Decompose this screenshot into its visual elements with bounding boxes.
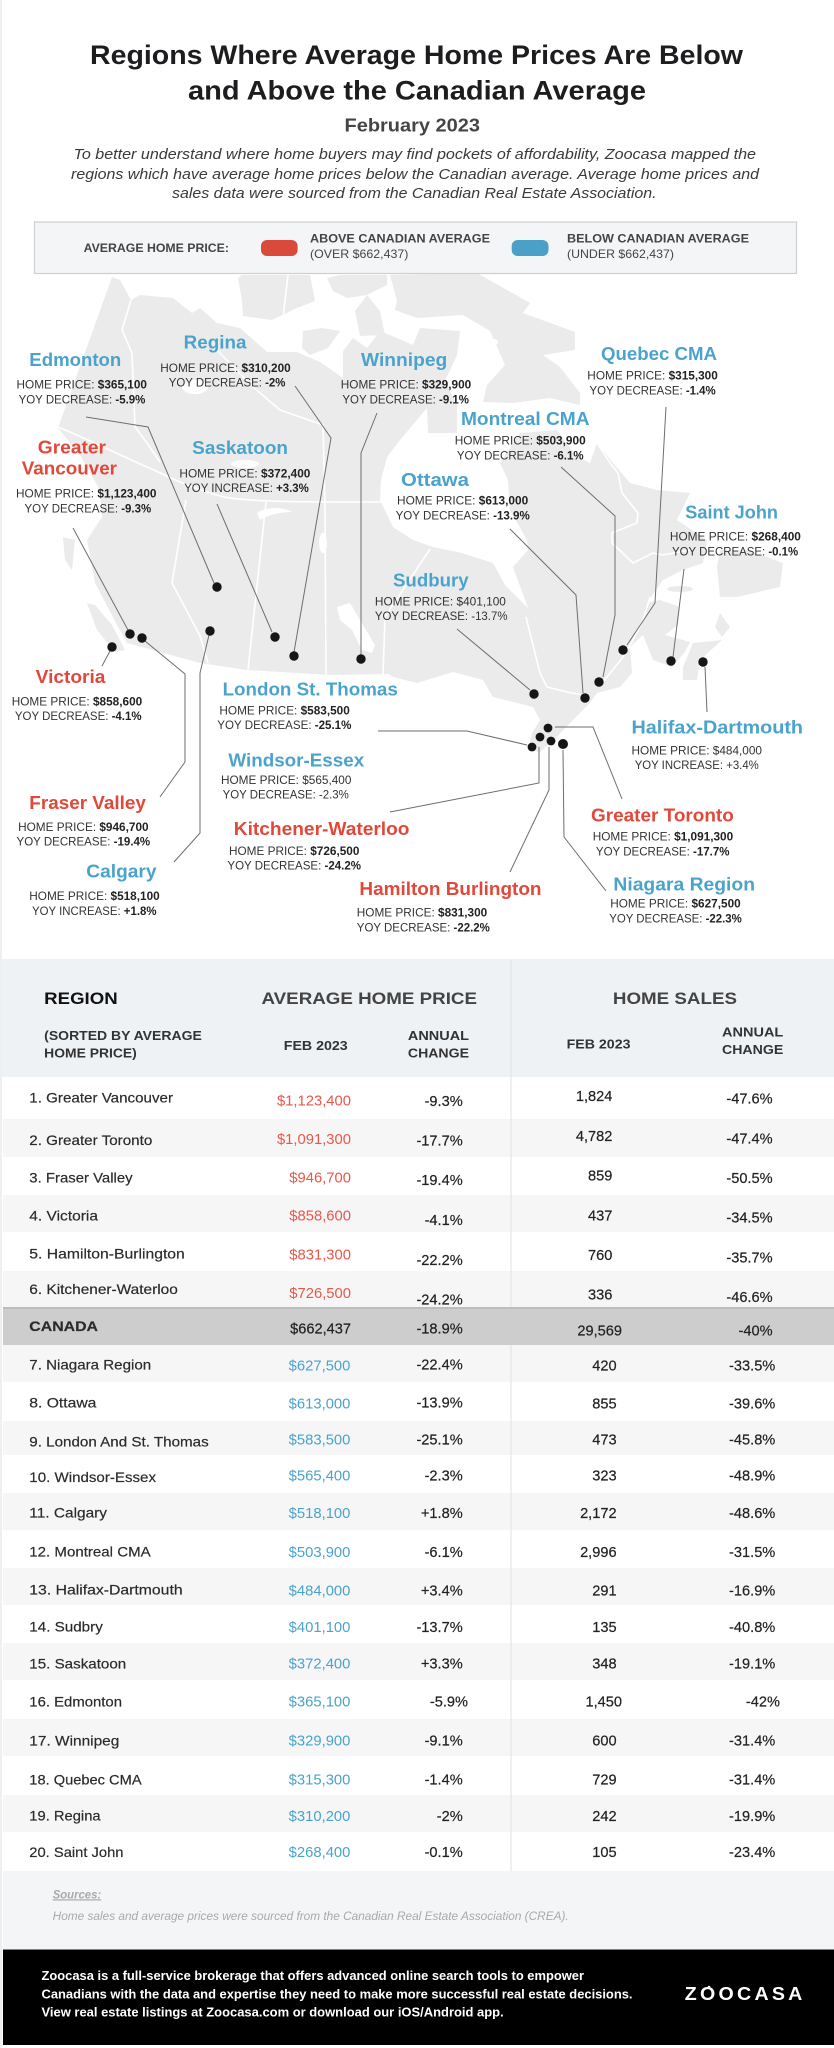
row: Montreal CMA: 12. Montreal CMA	[29, 1544, 151, 1560]
row: Victoria: $858,600	[289, 1209, 351, 1225]
footer text: Canadians with the data and expertise they need to make more successful real estate decisions.	[42, 1986, 632, 2001]
label: Ottawa	[396, 470, 530, 522]
row: Fraser Valley: $946,700	[289, 1170, 351, 1186]
row: Greater Vancouver: $1,123,400	[277, 1093, 351, 1109]
row: Edmonton: 16. Edmonton	[29, 1694, 122, 1710]
label: Sudbury: Sudbury	[393, 571, 469, 591]
label: Windsor-Essex: Windsor-Essex	[228, 751, 364, 771]
row: Calgary: +1.8%	[421, 1506, 463, 1522]
label: Calgary: HOME PRICE: $518,100	[29, 889, 160, 903]
label: Niagara Region: HOME PRICE: $627,500	[610, 897, 741, 911]
row: Hamilton-Burlington: -35.7%	[726, 1250, 773, 1266]
label: Edmonton: Edmonton	[29, 350, 121, 370]
label: Windsor-Essex	[221, 751, 364, 802]
map labels	[12, 333, 803, 935]
row: Fraser Valley	[29, 1169, 773, 1189]
label: Edmonton	[16, 350, 147, 406]
row: Edmonton	[29, 1694, 780, 1711]
label: Montreal CMA: YOY DECREASE: -6.1%	[457, 448, 584, 462]
row: Calgary: 2,172	[580, 1506, 617, 1522]
row: Ottawa: $613,000	[289, 1396, 350, 1412]
sources heading: Sources:	[53, 1887, 101, 1901]
footer text: Zoocasa is a full-service brokerage that offers advanced online search tools to empower	[42, 1968, 584, 1983]
label: Greater Toronto: YOY DECREASE: -17.7%	[596, 845, 730, 859]
label: Greater Toronto: Greater Toronto	[591, 806, 734, 826]
row: Niagara Region: 420	[592, 1358, 617, 1374]
row: Ottawa: -13.9%	[416, 1396, 463, 1412]
row: Regina	[29, 1808, 775, 1825]
row: Halifax-Dartmouth: $484,000	[289, 1583, 350, 1599]
intro paragraph: regions which have average home prices below the Canadian average. Average home prices and	[71, 167, 760, 183]
label: Greater Vancouver	[16, 438, 157, 516]
label: Victoria: YOY DECREASE: -4.1%	[15, 709, 142, 723]
row: Victoria: 4. Victoria	[29, 1208, 98, 1224]
row: Greater Toronto: $1,091,300	[277, 1132, 351, 1148]
row: Winnipeg: $329,900	[289, 1734, 350, 1750]
label: Quebec CMA: HOME PRICE: $315,300	[587, 369, 718, 383]
label: Niagara Region: YOY DECREASE: -22.3%	[609, 912, 742, 926]
label: Greater Toronto	[591, 806, 734, 859]
legend label: below average: BELOW CANADIAN AVERAGE	[567, 232, 749, 246]
title: and Above the Canadian Average	[188, 76, 646, 106]
row: Windsor-Essex: 10. Windsor-Essex	[29, 1469, 156, 1485]
table header: FEB 2023	[567, 1037, 630, 1052]
row: Greater Toronto: -47.4%	[726, 1131, 773, 1147]
label: Regina: YOY DECREASE: -2%	[169, 376, 286, 390]
label: Quebec CMA: Quebec CMA	[601, 344, 717, 364]
row: Greater Toronto	[29, 1129, 773, 1150]
row: Canada: 29,569	[577, 1323, 622, 1339]
label: Quebec CMA: YOY DECREASE: -1.4%	[590, 383, 716, 397]
table header: (SORTED BY AVERAGE	[44, 1028, 202, 1043]
row: Regina: 242	[592, 1809, 617, 1825]
label: Winnipeg: HOME PRICE: $329,900	[341, 378, 472, 392]
label: Saskatoon	[179, 438, 311, 495]
row: Halifax-Dartmouth: -16.9%	[729, 1583, 775, 1599]
row: Fraser Valley: -19.4%	[416, 1173, 463, 1189]
leader: Sudbury	[457, 629, 539, 699]
label: Greater Vancouver: Vancouver	[22, 459, 117, 479]
row: Sudbry	[29, 1619, 775, 1636]
row: Sudbry: 14. Sudbry	[29, 1619, 103, 1635]
label: Niagara Region: Niagara Region	[613, 875, 755, 895]
table header: AVERAGE HOME PRICE	[262, 990, 477, 1008]
label: Regina	[160, 333, 291, 390]
row: Saint John: $268,400	[289, 1845, 350, 1861]
sources text: Home sales and average prices were sourced from the Canadian Real Estate Association (CREA).	[53, 1911, 569, 1923]
row: Sudbry: -40.8%	[729, 1620, 775, 1636]
label: Sudbury	[375, 571, 508, 623]
row: Saskatoon: +3.3%	[421, 1657, 463, 1673]
row: Canada: CANADA	[29, 1318, 98, 1334]
panel: footer	[3, 1950, 834, 2045]
legend label: below average: (UNDER $662,437)	[567, 247, 674, 261]
table header: ANNUAL	[408, 1028, 469, 1043]
row: Regina: $310,200	[289, 1809, 350, 1825]
row: Winnipeg	[29, 1733, 775, 1750]
leader: Greater Vancouver	[73, 528, 135, 639]
row: Ottawa	[29, 1395, 775, 1412]
panel: sources	[3, 1871, 834, 1949]
footer text	[42, 1968, 632, 2020]
row: Greater Toronto: -17.7%	[416, 1134, 463, 1150]
label: Saskatoon: Saskatoon	[192, 438, 288, 458]
table header: CHANGE	[722, 1042, 784, 1057]
row: Hamilton-Burlington: 760	[588, 1248, 612, 1264]
label: Kitchener-Waterloo	[227, 819, 410, 873]
label: Hamilton Burlington: Hamilton Burlington	[359, 879, 542, 899]
row: Niagara Region: $627,500	[289, 1358, 350, 1374]
row: Quebec CMA: -31.4%	[729, 1773, 775, 1789]
label: Halifax-Dartmouth: HOME PRICE: $484,000	[632, 743, 762, 757]
label: Regina: Regina	[184, 333, 248, 353]
intro paragraph: sales data were sourced from the Canadian Real Estate Association.	[172, 186, 656, 202]
map leaders and city dots	[73, 386, 708, 891]
leader: Quebec	[618, 407, 666, 655]
header block	[71, 40, 760, 202]
logo: Zoocasa: ZOOCASA	[685, 1984, 806, 2004]
legend swatch: below average	[512, 240, 548, 256]
table header: CHANGE	[408, 1046, 469, 1061]
row: Ottawa: -39.6%	[729, 1396, 775, 1412]
title: Regions Where Average Home Prices Are Below	[90, 40, 744, 70]
row: Greater Vancouver: -47.6%	[726, 1091, 773, 1107]
label: Winnipeg: Winnipeg	[361, 350, 447, 370]
row: Greater Toronto: 4,782	[576, 1129, 612, 1145]
row: Montreal CMA	[29, 1544, 775, 1561]
label: Regina: HOME PRICE: $310,200	[160, 361, 291, 375]
legend label: above average: (OVER $662,437)	[310, 247, 408, 261]
row: London And St. Thomas: 9. London And St. Thomas	[29, 1433, 209, 1449]
label: Edmonton: YOY DECREASE: -5.9%	[19, 392, 146, 406]
row: Hamilton-Burlington: $831,300	[289, 1247, 351, 1263]
row: Canada	[3, 1307, 834, 1345]
row: Ottawa: 8. Ottawa	[29, 1395, 97, 1411]
row: Kitchener-Waterloo: -24.2%	[416, 1292, 463, 1308]
footer text: View real estate listings at Zoocasa.com or download our iOS/Android app.	[42, 2005, 504, 2020]
label: Halifax-Dartmouth: YOY INCREASE: +3.4%	[635, 758, 759, 772]
row: Victoria	[29, 1208, 773, 1229]
row: Quebec CMA: -1.4%	[425, 1773, 463, 1789]
row: Winnipeg: -9.1%	[425, 1734, 463, 1750]
row: Edmonton: -5.9%	[430, 1695, 468, 1711]
label: Montreal CMA: Montreal CMA	[461, 409, 590, 429]
label: Calgary: Calgary	[86, 861, 156, 881]
leader: Halifax	[698, 657, 708, 712]
row: Quebec CMA: $315,300	[289, 1773, 350, 1789]
subtitle date: February 2023	[344, 116, 480, 136]
label: Hamilton Burlington: HOME PRICE: $831,300	[357, 906, 488, 920]
label: Victoria	[12, 667, 143, 723]
leader: Montreal	[561, 467, 615, 687]
row: Windsor-Essex: -2.3%	[425, 1469, 463, 1485]
leader: Ottawa	[510, 529, 590, 703]
row: Windsor-Essex: $565,400	[289, 1469, 350, 1485]
row: Montreal CMA: $503,900	[289, 1545, 350, 1561]
leader: Niagara	[558, 739, 606, 891]
leader: Saskatoon	[217, 504, 280, 642]
row bands	[3, 1119, 834, 1832]
row: Sudbry: $401,100	[289, 1620, 350, 1636]
row: Greater Toronto: 2. Greater Toronto	[29, 1132, 153, 1148]
row: Windsor-Essex	[29, 1469, 775, 1485]
row: Fraser Valley: 3. Fraser Valley	[29, 1169, 133, 1185]
row: Saskatoon: -19.1%	[729, 1657, 775, 1673]
label: Fraser Valley	[16, 793, 151, 849]
leader: Kitchener	[390, 733, 544, 812]
row: Sudbry: -13.7%	[416, 1620, 463, 1636]
label: Saskatoon: YOY INCREASE: +3.3%	[184, 481, 309, 495]
label: Saint John: YOY DECREASE: -0.1%	[672, 544, 799, 558]
leader: Winnipeg	[356, 413, 377, 664]
label: Ottawa: HOME PRICE: $613,000	[397, 494, 529, 508]
label: Greater Toronto: HOME PRICE: $1,091,300	[593, 830, 734, 844]
row: Calgary	[29, 1505, 775, 1522]
row: Saint John	[29, 1844, 775, 1861]
label: London St. Thomas	[217, 680, 398, 732]
row: Hamilton-Burlington: 5. Hamilton-Burlington	[29, 1245, 185, 1261]
label: Montreal CMA: HOME PRICE: $503,900	[455, 434, 586, 448]
row: Halifax-Dartmouth: 291	[592, 1583, 617, 1599]
label: Fraser Valley: YOY DECREASE: -19.4%	[16, 835, 151, 849]
leader: London	[378, 731, 536, 751]
label: Saint John: Saint John	[685, 502, 778, 522]
leader: Calgary	[174, 626, 215, 862]
label: Ottawa: YOY DECREASE: -13.9%	[396, 508, 530, 522]
leader: Saint John	[666, 569, 684, 666]
table header: ANNUAL	[722, 1025, 783, 1040]
row: Kitchener-Waterloo: 336	[588, 1288, 612, 1304]
label: Fraser Valley: HOME PRICE: $946,700	[18, 820, 149, 834]
row: Hamilton-Burlington	[29, 1245, 773, 1269]
label: London St. Thomas: YOY DECREASE: -25.1%	[217, 718, 352, 732]
row: Saskatoon: 15. Saskatoon	[29, 1655, 126, 1671]
row: Saint John: 20. Saint John	[29, 1844, 123, 1860]
row: Niagara Region: -22.4%	[416, 1358, 463, 1374]
panel: data table	[2, 959, 834, 1871]
row: London And St. Thomas: -45.8%	[729, 1433, 775, 1449]
legend label: below average	[567, 232, 749, 261]
row: Quebec CMA	[29, 1772, 775, 1789]
label: Greater Vancouver: YOY DECREASE: -9.3%	[24, 502, 152, 516]
intro paragraph: To better understand where home buyers may find pockets of affordability, Zoocasa mapped the	[74, 147, 756, 163]
row: Windsor-Essex: -48.9%	[729, 1469, 775, 1485]
label: Calgary	[29, 861, 160, 918]
label: Fraser Valley: Fraser Valley	[29, 793, 146, 813]
label: Niagara Region	[609, 875, 755, 926]
label: London St. Thomas: HOME PRICE: $583,500	[219, 703, 350, 717]
label: Kitchener-Waterloo: HOME PRICE: $726,500	[229, 844, 360, 858]
label: Greater Vancouver: HOME PRICE: $1,123,400	[16, 487, 157, 501]
leader: Edmonton	[86, 417, 222, 592]
label: Winnipeg	[341, 350, 472, 406]
label: Greater Vancouver: Greater	[38, 438, 106, 458]
label: Saskatoon: HOME PRICE: $372,400	[179, 466, 311, 480]
row: Hamilton-Burlington: -22.2%	[416, 1253, 463, 1269]
row: Kitchener-Waterloo: 6. Kitchener-Waterloo	[29, 1281, 178, 1297]
intro paragraph	[71, 147, 760, 202]
row: Saskatoon: 348	[592, 1657, 617, 1673]
label: Halifax-Dartmouth: Halifax-Dartmouth	[632, 717, 803, 737]
label: Windsor-Essex: HOME PRICE: $565,400	[221, 773, 352, 787]
row: Windsor-Essex: 323	[592, 1469, 617, 1485]
row: Saskatoon	[29, 1655, 775, 1673]
leader: Victoria	[102, 642, 117, 666]
row: Greater Vancouver: -9.3%	[425, 1094, 463, 1110]
row: Ottawa: 855	[592, 1396, 617, 1412]
label: Windsor-Essex: YOY DECREASE: -2.3%	[223, 788, 349, 802]
label: Sudbury: YOY DECREASE: -13.7%	[375, 609, 508, 623]
row: Winnipeg: 600	[592, 1734, 617, 1750]
row: Sudbry: 135	[592, 1620, 617, 1636]
legend label: above average: ABOVE CANADIAN AVERAGE	[310, 232, 490, 246]
row: Fraser Valley: -50.5%	[726, 1171, 773, 1187]
row: Calgary: 11. Calgary	[29, 1505, 107, 1521]
row: Kitchener-Waterloo: -46.6%	[726, 1290, 773, 1306]
label: Halifax-Dartmouth	[632, 717, 803, 772]
label: Victoria: Victoria	[36, 667, 106, 687]
row: Canada: -18.9%	[416, 1322, 463, 1338]
row: Saskatoon: $372,400	[289, 1657, 350, 1673]
row: Regina: -19.9%	[729, 1809, 775, 1825]
row: London And St. Thomas	[29, 1433, 775, 1449]
row: Halifax-Dartmouth: +3.4%	[421, 1583, 463, 1599]
row: Winnipeg: -31.4%	[729, 1734, 775, 1750]
table header: HOME SALES	[613, 990, 737, 1008]
label: Hamilton Burlington: YOY DECREASE: -22.2%	[357, 921, 490, 935]
row: Saint John: -0.1%	[425, 1845, 463, 1861]
row: Edmonton: $365,100	[289, 1695, 350, 1711]
row: Niagara Region: 7. Niagara Region	[29, 1357, 151, 1373]
row: Quebec CMA: 729	[592, 1773, 617, 1789]
row: Greater Vancouver: 1,824	[576, 1089, 612, 1105]
label: Saint John: HOME PRICE: $268,400	[670, 530, 801, 544]
row: Halifax-Dartmouth	[29, 1582, 775, 1599]
label: Kitchener-Waterloo: YOY DECREASE: -24.2%	[227, 859, 361, 873]
leader: Toronto	[544, 724, 622, 799]
legend	[34, 222, 796, 274]
row: Calgary: -48.6%	[729, 1506, 775, 1522]
label: Montreal CMA	[455, 409, 590, 462]
row: Saint John: -23.4%	[729, 1845, 775, 1861]
legend: AVERAGE HOME PRICE:	[84, 241, 229, 255]
row: Winnipeg: 17. Winnipeg	[29, 1733, 119, 1749]
label: Quebec CMA	[587, 344, 718, 397]
row: Edmonton: -42%	[746, 1695, 780, 1711]
table header: FEB 2023	[284, 1038, 348, 1053]
row: Greater Vancouver	[29, 1089, 773, 1110]
row: London And St. Thomas: 473	[592, 1433, 617, 1449]
row: Regina: -2%	[437, 1809, 463, 1825]
label: Victoria: HOME PRICE: $858,600	[12, 694, 143, 708]
row: Niagara Region	[29, 1357, 775, 1374]
label: Sudbury: HOME PRICE: $401,100	[375, 594, 506, 608]
row: Calgary: $518,100	[289, 1506, 350, 1522]
row: Quebec CMA: 18. Quebec CMA	[29, 1772, 142, 1788]
row: London And St. Thomas: $583,500	[289, 1433, 350, 1449]
label: Saint John	[670, 502, 801, 558]
row: Kitchener-Waterloo	[29, 1281, 773, 1308]
row: Montreal CMA: 2,996	[580, 1545, 617, 1561]
legend label: above average	[310, 232, 490, 261]
row: Victoria: -34.5%	[726, 1211, 773, 1227]
row: Victoria: -4.1%	[425, 1213, 463, 1229]
row: Niagara Region: -33.5%	[729, 1358, 775, 1374]
row: Halifax-Dartmouth: 13. Halifax-Dartmouth	[29, 1582, 183, 1598]
legend swatch: above average	[261, 240, 298, 256]
row: Saint John: 105	[592, 1845, 617, 1861]
label: Winnipeg: YOY DECREASE: -9.1%	[342, 392, 469, 406]
row: Canada: -40%	[739, 1323, 773, 1339]
table header: HOME PRICE)	[44, 1046, 137, 1061]
table header: REGION	[44, 990, 118, 1008]
row: Montreal CMA: -6.1%	[425, 1545, 463, 1561]
title	[90, 40, 744, 106]
row: Greater Vancouver: 1. Greater Vancouver	[29, 1090, 173, 1106]
label: Edmonton: HOME PRICE: $365,100	[16, 378, 147, 392]
map: Canada silhouette	[58, 273, 783, 752]
label: Calgary: YOY INCREASE: +1.8%	[32, 904, 157, 918]
row: Regina: 19. Regina	[29, 1808, 101, 1824]
label: Hamilton Burlington	[357, 879, 542, 935]
leader: Hamilton	[510, 737, 555, 872]
row: Kitchener-Waterloo: $726,500	[289, 1286, 351, 1302]
row: Edmonton: 1,450	[585, 1695, 622, 1711]
row: Fraser Valley: 859	[588, 1169, 612, 1185]
label: Ottawa: Ottawa	[401, 470, 470, 490]
row: Victoria: 437	[588, 1208, 612, 1224]
row: Canada: $662,437	[290, 1322, 351, 1338]
label: Kitchener-Waterloo: Kitchener-Waterloo	[234, 819, 410, 839]
column divider	[510, 960, 512, 1871]
table header	[2, 959, 834, 1077]
row: London And St. Thomas: -25.1%	[416, 1433, 463, 1449]
row: Montreal CMA: -31.5%	[729, 1545, 775, 1561]
label: London St. Thomas: London St. Thomas	[223, 680, 398, 700]
leader: Fraser Valley	[137, 633, 185, 797]
leader: Regina	[289, 386, 331, 661]
